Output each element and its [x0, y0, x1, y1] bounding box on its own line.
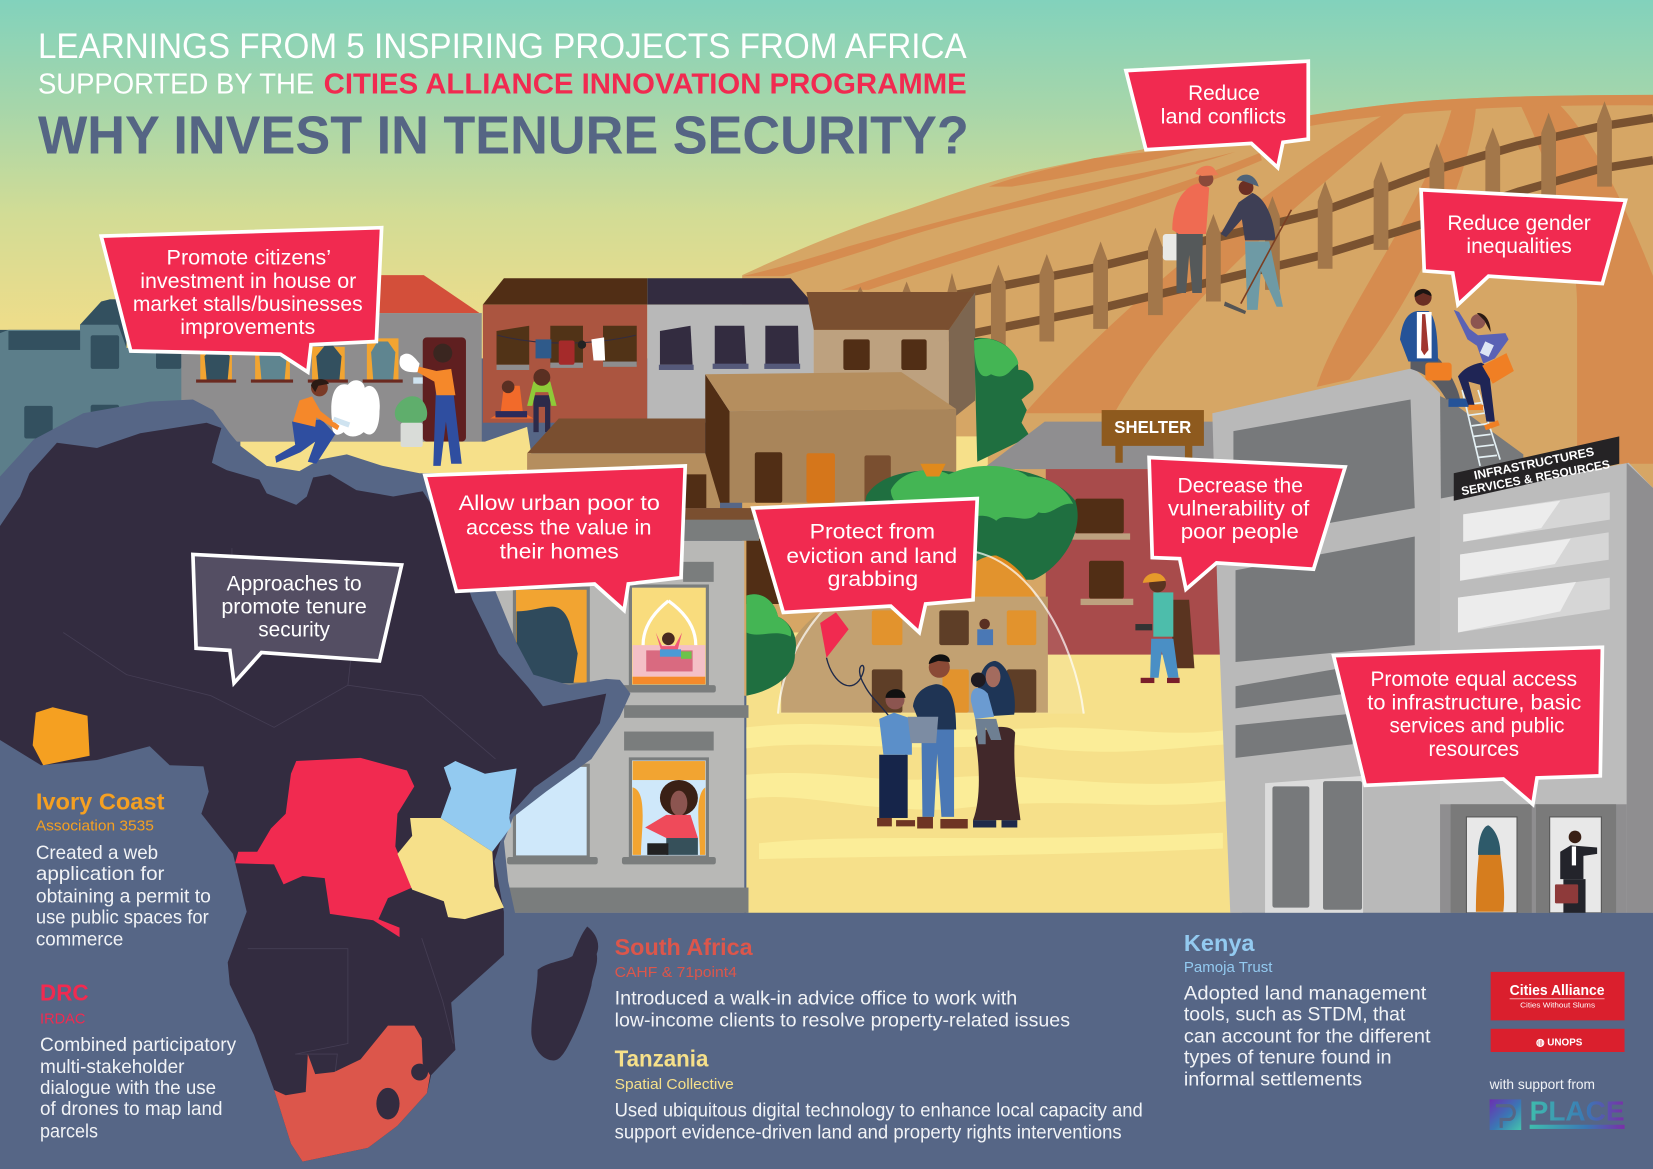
sign: infrastructures services and resources [1454, 436, 1619, 501]
sea outline around Africa [0, 400, 630, 915]
text block: DRC: parcels [40, 1121, 98, 1142]
text block: Kenya: can account for the different [1184, 1027, 1431, 1048]
text block: Kenya: Adopted land management [1184, 983, 1427, 1004]
sign: shelter [1102, 410, 1204, 463]
title block: CITIES ALLIANCE INNOVATION PROGRAMME [324, 68, 967, 100]
text block: Ivory Coast: obtaining a permit to [36, 886, 211, 907]
callout: promote citizens investment: market stalls/businesses [133, 291, 363, 316]
logo: Cities Alliance [1491, 972, 1625, 1020]
elevators [1440, 804, 1627, 913]
callout: approaches to promote tenure security: Approaches to [227, 570, 362, 595]
house: grey with dark roof [647, 278, 814, 423]
text block: Tanzania: support evidence-driven land and property rights interventions [615, 1122, 1122, 1143]
person: man with hat near shelter [1135, 573, 1194, 683]
callout: approaches to promote tenure security: security [258, 617, 330, 642]
Madagascar [531, 927, 598, 1061]
Lesotho [376, 1088, 400, 1119]
callout: promote equal access: Promote equal access [1370, 666, 1577, 691]
logo: PLACE [1490, 1096, 1625, 1130]
person: man sitting on roof [1400, 289, 1472, 407]
text block: Ivory Coast: Ivory Coast [36, 789, 165, 815]
map of Africa [0, 423, 606, 1162]
callout: reduce gender inequalities: inequalities [1466, 233, 1572, 258]
window: woman cooking [622, 759, 716, 864]
text block: South Africa: South Africa [615, 934, 754, 960]
house: tan with brown roof [806, 292, 975, 422]
person: kneeling painter [275, 379, 350, 464]
tree: large bush [865, 464, 1078, 580]
bottom band [0, 913, 1653, 1169]
callout: promote citizens investment: improvements [180, 314, 315, 339]
text block: South Africa: low-income clients to resolve property-related issues [615, 1011, 1070, 1032]
logo: UNOPS: ◍ UNOPS [1536, 1038, 1583, 1049]
house: low brown roof [527, 418, 764, 521]
Tanzania [397, 818, 504, 919]
text block: Kenya: types of tenure found in [1184, 1048, 1392, 1069]
concrete buildings [1212, 368, 1653, 913]
text block: DRC: multi-stakeholder [40, 1057, 184, 1078]
callout: decrease vulnerability: poor people [1181, 519, 1299, 544]
text block: Kenya: Kenya [1184, 930, 1256, 956]
callout: allow urban poor: their homes [500, 539, 619, 564]
South Africa [274, 1026, 430, 1162]
house: cardboard shack [705, 372, 956, 503]
house: grey with red roof [181, 275, 482, 442]
text block: Tanzania: Spatial Collective [615, 1077, 734, 1093]
kite [820, 612, 907, 759]
Africa landmass [0, 423, 606, 1162]
callout: reduce gender inequalities: Reduce gender [1447, 210, 1591, 235]
Kenya [441, 761, 517, 852]
potted plant [395, 396, 427, 447]
callout: promote citizens investment: investment in house or [140, 268, 356, 293]
white paint patch [331, 380, 380, 437]
person: boy [877, 689, 915, 826]
logo: Cities Alliance: Cities Alliance [1510, 983, 1605, 999]
callout: promote equal access: resources [1428, 736, 1519, 761]
text block: DRC: Combined participatory [40, 1035, 237, 1056]
person: woman in elevator [1476, 825, 1504, 912]
family group with kite [820, 612, 1020, 829]
callout: reduce land conflicts: Reduce [1188, 80, 1260, 105]
callout: approaches to promote tenure security: promote tenure [221, 593, 367, 618]
houses: blue building far left [0, 299, 184, 487]
text block: Kenya: tools, such as STDM, that [1184, 1004, 1406, 1025]
tree: behind tan house [974, 338, 1033, 462]
text block: Tanzania: Used ubiquitous digital technology to enhance local capacity and [615, 1100, 1143, 1121]
callout: approaches to promote tenure security [193, 554, 402, 683]
callout: promote citizens investment: Promote citizens’ [167, 245, 331, 270]
house: brick with laundry [483, 278, 647, 423]
text block: Ivory Coast: use public spaces for [36, 907, 209, 928]
sand patch behind tree [956, 436, 988, 479]
callout: decrease vulnerability: vulnerability of [1168, 495, 1310, 520]
wooden fence [856, 101, 1653, 353]
dome house [778, 550, 1084, 714]
sky background [0, 0, 1653, 358]
sand path by the houses [240, 427, 538, 495]
farmland hill [742, 95, 1653, 696]
callout: promote equal access: to infrastructure, basic [1367, 689, 1581, 714]
text block: Ivory Coast: Created a web [36, 843, 158, 864]
callout: protect from eviction: eviction and land [786, 543, 957, 568]
window: baby in crib [622, 586, 716, 693]
callout: allow urban poor: Allow urban poor to [459, 490, 660, 515]
text block: South Africa [615, 934, 1070, 1032]
person: farmer with bucket [1163, 166, 1219, 293]
person: woman climbing ladder [1454, 310, 1514, 430]
person: woman with child [971, 661, 1020, 827]
title block: LEARNINGS FROM 5 INSPIRING PROJECTS FROM AFRICA [38, 28, 967, 66]
window: curtains [514, 588, 588, 684]
callout: reduce land conflicts: land conflicts [1161, 103, 1286, 128]
text block: Ivory Coast: commerce [36, 930, 123, 951]
text: with support from: with support from [1489, 1077, 1595, 1092]
person: standing painter [400, 344, 462, 466]
callout: promote equal access: services and public [1389, 713, 1565, 738]
callout: decrease vulnerability [1149, 457, 1345, 589]
logo: PLACE: PLACE [1530, 1096, 1625, 1127]
text block: Kenya: informal settlements [1184, 1070, 1362, 1091]
tall residential building [464, 520, 786, 913]
text block: DRC [40, 979, 237, 1142]
logo: Cities Alliance: Cities Without Slums [1520, 1001, 1595, 1010]
person: man in elevator [1555, 831, 1597, 913]
text block: South Africa: CAHF & 71point4 [615, 965, 737, 981]
callout: protect from eviction [753, 499, 977, 632]
tree: small left of dome [746, 594, 796, 696]
callout: allow urban poor: access the value in [466, 514, 652, 539]
title block: SUPPORTED BY THE [38, 68, 314, 100]
text block: Ivory Coast [36, 789, 211, 951]
callout: allow urban poor [425, 466, 685, 610]
shelter building [983, 422, 1223, 655]
person: farmer with rake [1221, 175, 1291, 314]
title block: WHY INVEST IN TENURE SECURITY? [38, 105, 969, 165]
sign: shelter: SHELTER [1114, 417, 1191, 437]
callout: reduce gender inequalities [1421, 190, 1626, 305]
callout: promote citizens investment [101, 228, 382, 372]
logo: UNOPS [1491, 1029, 1625, 1052]
Eswatini [411, 1064, 428, 1080]
sign: infrastructures services and resources: INFRASTRUCTURES [1473, 444, 1595, 483]
DRC [235, 758, 414, 937]
person: man with bag [908, 654, 968, 829]
title block [38, 28, 969, 165]
callout: promote equal access [1334, 647, 1602, 804]
ladder [1462, 390, 1500, 466]
callout: protect from eviction: grabbing [828, 566, 918, 591]
callout: decrease vulnerability: Decrease the [1178, 472, 1303, 497]
callout: reduce land conflicts [1126, 61, 1308, 168]
text block: Ivory Coast: application for [36, 864, 164, 885]
window: light blue interior [507, 765, 598, 864]
text block: South Africa: Introduced a walk-in advice office to work with [615, 989, 1017, 1010]
sand ground [746, 632, 1242, 913]
text block: Tanzania [615, 1046, 1143, 1143]
text block: DRC: of drones to map land [40, 1099, 222, 1120]
text block: DRC: IRDAC [40, 1012, 86, 1028]
text block: Kenya [1184, 930, 1431, 1091]
children playing [490, 369, 557, 432]
text block: Tanzania: Tanzania [615, 1046, 709, 1072]
text block: DRC: DRC [40, 979, 89, 1005]
sign: infrastructures services and resources: SERVICES & RESOURCES [1460, 457, 1611, 498]
text block: Kenya: Pamoja Trust [1184, 960, 1272, 976]
Ivory Coast [33, 707, 90, 765]
callout: protect from eviction: Protect from [810, 519, 935, 544]
text block: Ivory Coast: Association 3535 [36, 819, 154, 835]
text block: DRC: dialogue with the use [40, 1078, 216, 1099]
